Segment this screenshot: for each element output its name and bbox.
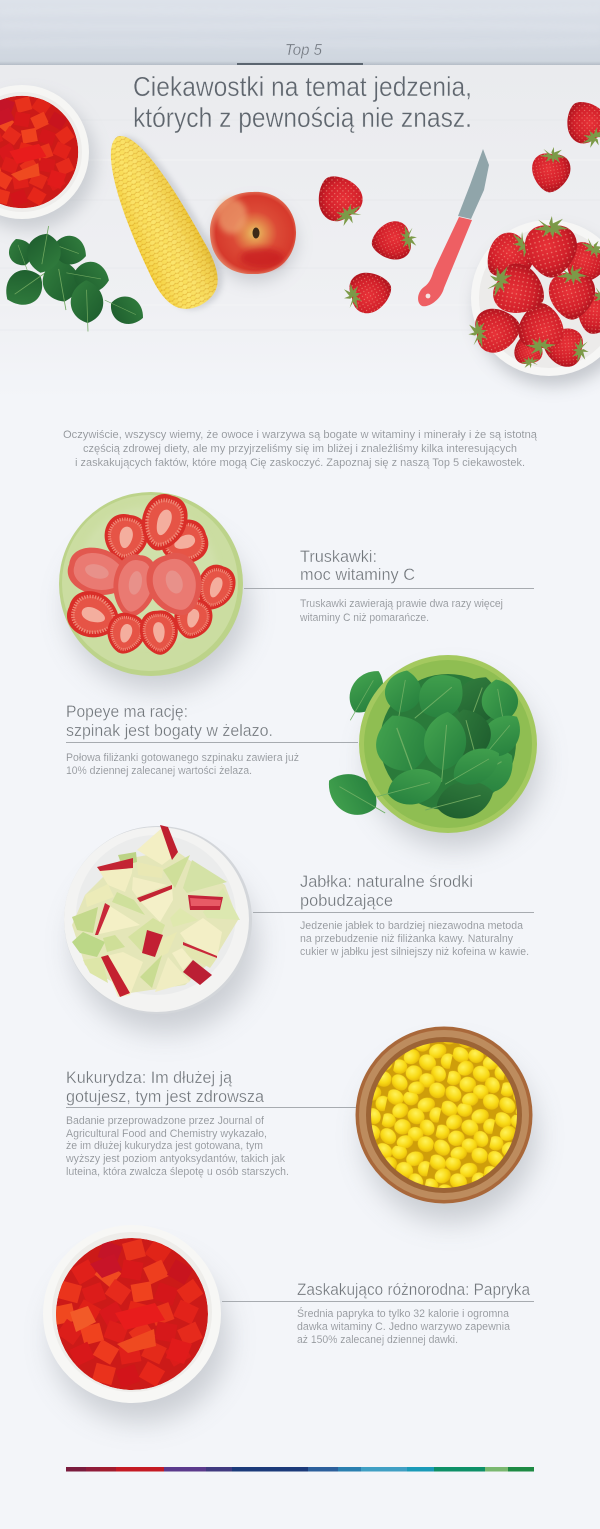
body text: cukier w jabłku jest silniejszy niż kofeina w kawie. — [300, 946, 529, 958]
green bowl of spinach — [319, 655, 540, 848]
body text: 10% dziennej zalecanej wartości żelaza. — [66, 765, 252, 777]
body text: Agricultural Food and Chemistry wykazało, — [66, 1128, 267, 1140]
white bowl of chopped peppers — [43, 1225, 228, 1422]
hero: white table with food — [0, 0, 600, 400]
panel: apples — [64, 825, 534, 1033]
heading: szpinak jest bogaty w żelazo. — [66, 721, 273, 740]
loose strawberries — [308, 93, 600, 319]
body text: Połowa filiżanki gotowanego szpinaku zawiera już — [66, 752, 299, 764]
green plate with sliced strawberries — [59, 489, 248, 690]
heading — [300, 872, 473, 910]
intro paragraph: Oczywiście, wszyscy wiemy, że owoce i warzywa są bogate w witaminy i minerały i że są istotną — [63, 429, 537, 441]
body text: Truskawki zawierają prawie dwa razy więcej — [300, 598, 503, 610]
body text: Jedzenie jabłek to bardziej niezawodna metoda — [300, 920, 523, 932]
body text — [299, 598, 503, 624]
rule — [244, 588, 534, 589]
intro paragraph — [63, 429, 537, 469]
body text: wyższy jest poziom antyoksydantów, takich jak — [65, 1153, 286, 1165]
heading: Popeye ma rację: — [66, 702, 188, 721]
body text: na przebudzenie niż filiżanka kawy. Naturalny — [300, 933, 514, 945]
body text — [65, 1115, 289, 1178]
intro paragraph: i zaskakujących faktów, które mogą Cię zaskoczyć. Zapoznaj się z naszą Top 5 ciekawostek. — [75, 457, 525, 469]
title rule — [237, 63, 363, 65]
apple — [210, 192, 297, 282]
rule — [66, 1107, 356, 1108]
spinach leaves — [0, 223, 149, 332]
heading: pobudzające — [300, 891, 393, 910]
heading — [300, 547, 415, 584]
heading: Kukurydza: Im dłużej ją — [66, 1068, 233, 1087]
white plate with apple pieces — [64, 825, 257, 1033]
body text: aż 150% zalecanej dziennej dawki. — [297, 1334, 458, 1346]
body text — [66, 752, 299, 777]
wooden bowl of corn — [356, 1026, 536, 1222]
title: Ciekawostki na temat jedzenia, — [133, 71, 472, 102]
rule — [222, 1301, 534, 1302]
rule — [66, 742, 358, 743]
body text: dawka witaminy C. Jedno warzywo zapewnia — [297, 1321, 510, 1333]
white table surface — [0, 65, 600, 400]
heading — [66, 702, 273, 740]
corn cob — [89, 120, 235, 322]
upper grey-blue wooden plank — [0, 0, 600, 65]
panel: peppers — [43, 1225, 534, 1422]
paring knife — [418, 149, 489, 306]
bowl of chopped peppers — [0, 85, 96, 230]
body text: Średnia papryka to tylko 32 kalorie i ogromna — [297, 1307, 509, 1320]
heading — [66, 1068, 265, 1106]
panel: spinach — [66, 655, 540, 848]
heading: gotujesz, tym jest zdrowsza — [66, 1087, 265, 1106]
body text: witaminy C niż pomarańcze. — [299, 612, 429, 624]
bowl of strawberries — [465, 216, 600, 386]
body text — [300, 920, 529, 958]
rule — [253, 912, 534, 913]
title: których z pewnością nie znasz. — [133, 102, 472, 133]
label: Top 5: Top 5 — [285, 42, 322, 59]
panel: corn — [65, 1026, 536, 1222]
multicolour footer bar — [66, 1467, 534, 1472]
heading: Truskawki: — [300, 547, 377, 566]
intro paragraph: częścią zdrowej diety, ale my przyjrzeliśmy się im bliżej i znaleźliśmy kilka interesujących — [83, 443, 517, 455]
body text: że im dłużej kukurydza jest gotowana, tym — [66, 1140, 263, 1152]
body text: luteina, która zwalcza ślepotę u osób starszych. — [66, 1166, 289, 1178]
heading: Jabłka: naturalne środki — [300, 872, 473, 891]
heading: moc witaminy C — [300, 565, 415, 584]
panel: strawberries — [59, 489, 534, 690]
heading: Zaskakująco różnorodna: Papryka — [297, 1280, 530, 1299]
body text — [297, 1307, 510, 1346]
body text: Badanie przeprowadzone przez Journal of — [66, 1115, 265, 1127]
title — [133, 71, 472, 133]
